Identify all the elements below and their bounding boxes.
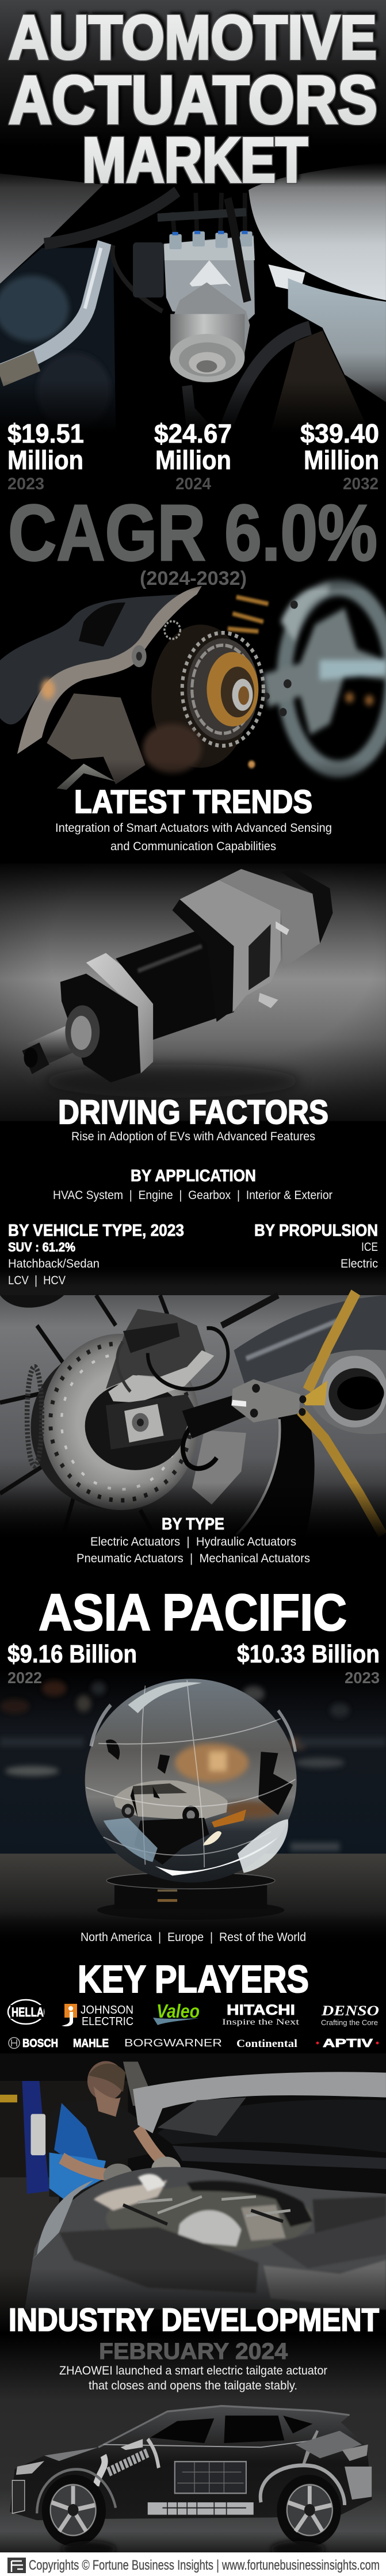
segment: by vehicle type: LCV | HCV bbox=[8, 1274, 66, 1287]
development text: ZHAOWEI launched a smart electric tailgate actuator bbox=[59, 2364, 327, 2377]
stat: 2032 value: Million bbox=[304, 445, 379, 475]
logo: Continental: Continental bbox=[236, 2038, 297, 2050]
logo: Aptiv: APTIV bbox=[323, 2037, 373, 2050]
logo: Hella bbox=[8, 2000, 44, 2024]
panel: gearbox actuator photo bbox=[0, 863, 386, 1121]
segment: by application: BY APPLICATION bbox=[131, 1167, 256, 1185]
panel: title background gradient bbox=[0, 0, 386, 173]
logo: Hitachi bbox=[222, 2002, 300, 2027]
logo: Denso: Crafting the Core bbox=[321, 2018, 378, 2027]
segment: by propulsion: Electric bbox=[341, 1257, 378, 1270]
title bbox=[9, 2, 377, 196]
stat: asia pacific 2022: 2022 bbox=[7, 1669, 42, 1687]
segment: by vehicle type: SUV : 61.2% bbox=[8, 1240, 75, 1254]
stat: 2023 value: Million bbox=[7, 445, 83, 475]
panel: mechanic working on engine photo bbox=[0, 2053, 386, 2334]
panel: crystal globe with car photo bbox=[0, 1669, 386, 1947]
logo: Johnson Electric: JOHNSON bbox=[81, 2004, 133, 2016]
stat: 2032 value: $39.40 bbox=[300, 418, 379, 448]
panel: motorcycle brake disc photo bbox=[0, 1268, 386, 1539]
stat: 2023 value: 2023 bbox=[7, 475, 44, 493]
other regions: North America | Europe | Rest of the World bbox=[81, 1930, 306, 1944]
stat: 2032 value bbox=[300, 418, 379, 493]
latest trends text: and Communication Capabilities bbox=[110, 839, 276, 853]
segment: by type: BY TYPE bbox=[162, 1515, 224, 1534]
development text bbox=[59, 2364, 327, 2392]
latest trends text bbox=[55, 821, 332, 853]
segment: by type: Electric Actuators | Hydraulic Actuators bbox=[90, 1535, 296, 1548]
panel: gear mechanism photo bbox=[0, 566, 386, 863]
heading: key players: KEY PLAYERS bbox=[78, 1958, 309, 2001]
heading: asia pacific: ASIA PACIFIC bbox=[39, 1584, 347, 1642]
segment: by application bbox=[53, 1167, 333, 1202]
footer bar bbox=[0, 2552, 386, 2576]
logo: Hella: HELLA bbox=[12, 2005, 44, 2019]
stat: 2023 value: $19.51 bbox=[7, 418, 84, 448]
heading: latest trends: LATEST TRENDS bbox=[74, 783, 312, 820]
logo: Bosch: BOSCH bbox=[22, 2037, 58, 2050]
segment: by vehicle type: BY VEHICLE TYPE, 2023 bbox=[8, 1222, 184, 1240]
driving factors text: Rise in Adoption of EVs with Advanced Features bbox=[71, 1129, 315, 1143]
icon: Fortune Business Insights logo bbox=[7, 2558, 26, 2573]
stat: 2024 value bbox=[154, 418, 232, 493]
logo: Johnson Electric bbox=[62, 2004, 133, 2028]
title: MARKET bbox=[82, 125, 308, 196]
segment: by vehicle type bbox=[8, 1222, 184, 1287]
latest trends text: Integration of Smart Actuators with Advanced Sensing bbox=[55, 821, 332, 835]
segment: by type bbox=[77, 1515, 310, 1565]
logo: Valeo: Valeo bbox=[156, 2000, 200, 2022]
development text: that closes and opens the tailgate stably. bbox=[89, 2379, 297, 2392]
stat: asia pacific 2022: $9.16 Billion bbox=[7, 1640, 137, 1668]
logo: Bosch bbox=[9, 2037, 58, 2050]
logo: Denso: DENSO bbox=[321, 2003, 379, 2019]
stat: 2024 value: 2024 bbox=[175, 475, 211, 493]
segment: by propulsion: ICE bbox=[361, 1241, 378, 1254]
logo: Hitachi: HITACHI bbox=[227, 2002, 295, 2018]
CAGR period: (2024-2032) bbox=[140, 568, 247, 589]
panel: electric car cutaway photo bbox=[0, 2334, 386, 2558]
development date: FEBRUARY 2024 bbox=[99, 2339, 288, 2364]
segment: by application: HVAC System | Engine | Gearbox | Interior & Exterior bbox=[53, 1189, 333, 1202]
panel: engine bay ABS actuator photo bbox=[0, 162, 386, 432]
market size statistics bbox=[7, 418, 379, 493]
logo: Aptiv bbox=[316, 2037, 379, 2050]
segment: by vehicle type: Hatchback/Sedan bbox=[8, 1257, 100, 1270]
logo: BorgWarner: BORGWARNER bbox=[124, 2037, 222, 2049]
stat: 2024 value: Million bbox=[155, 445, 231, 475]
segment: by propulsion bbox=[254, 1222, 378, 1270]
logo: Hitachi: Inspire the Next bbox=[222, 2018, 300, 2027]
logo: Mahle: MAHLE bbox=[73, 2037, 109, 2050]
logo: Denso bbox=[321, 2003, 379, 2027]
logo: Johnson Electric: ELECTRIC bbox=[82, 2015, 133, 2028]
stat: asia pacific 2023 bbox=[237, 1640, 380, 1687]
stat: asia pacific 2023: 2023 bbox=[345, 1669, 380, 1687]
stat: 2024 value: $24.67 bbox=[154, 418, 232, 448]
stat: 2023 value bbox=[7, 418, 84, 493]
segment: by type: Pneumatic Actuators | Mechanical Actuators bbox=[77, 1552, 310, 1565]
heading: driving factors: DRIVING FACTORS bbox=[58, 1094, 328, 1131]
stat: 2032 value: 2032 bbox=[343, 475, 379, 493]
stat: asia pacific 2022 bbox=[7, 1640, 137, 1687]
